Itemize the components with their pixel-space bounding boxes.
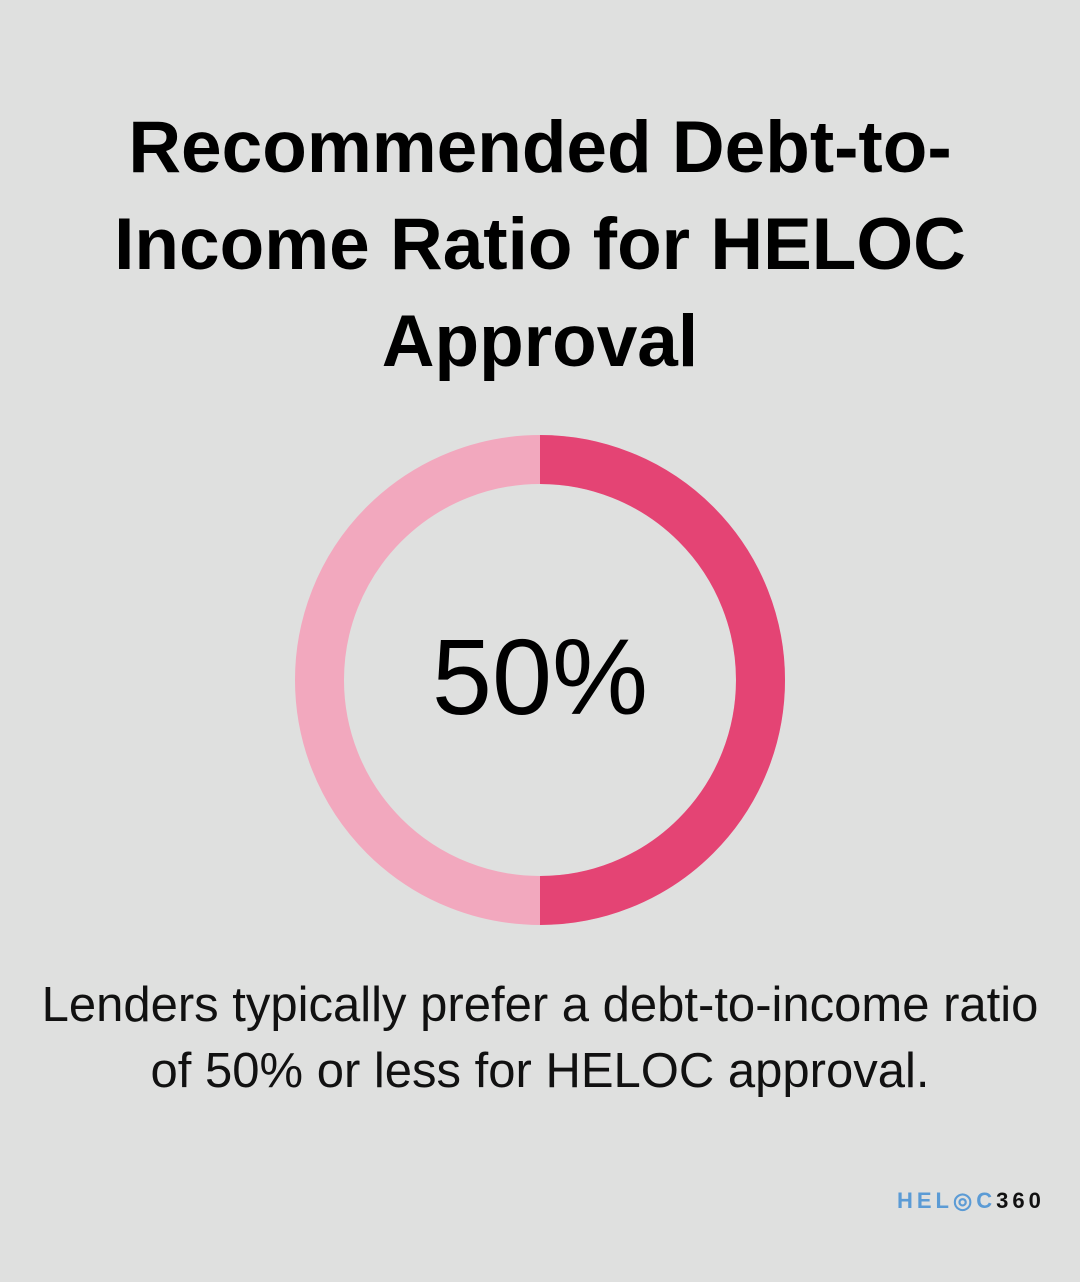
ring highlighted segment 50% [540, 460, 760, 900]
description text [42, 978, 1038, 1098]
title: Income Ratio for HELOC [114, 204, 966, 285]
ring background segment [320, 460, 760, 900]
title: Approval [382, 301, 698, 382]
description text: of 50% or less for HELOC approval. [151, 1044, 929, 1098]
title [114, 107, 966, 382]
center value: 50% [432, 616, 648, 737]
title: Recommended Debt-to- [128, 107, 952, 188]
logo: HEL◎C360 [897, 1188, 1045, 1213]
description text: Lenders typically prefer a debt-to-income ratio [42, 978, 1038, 1032]
